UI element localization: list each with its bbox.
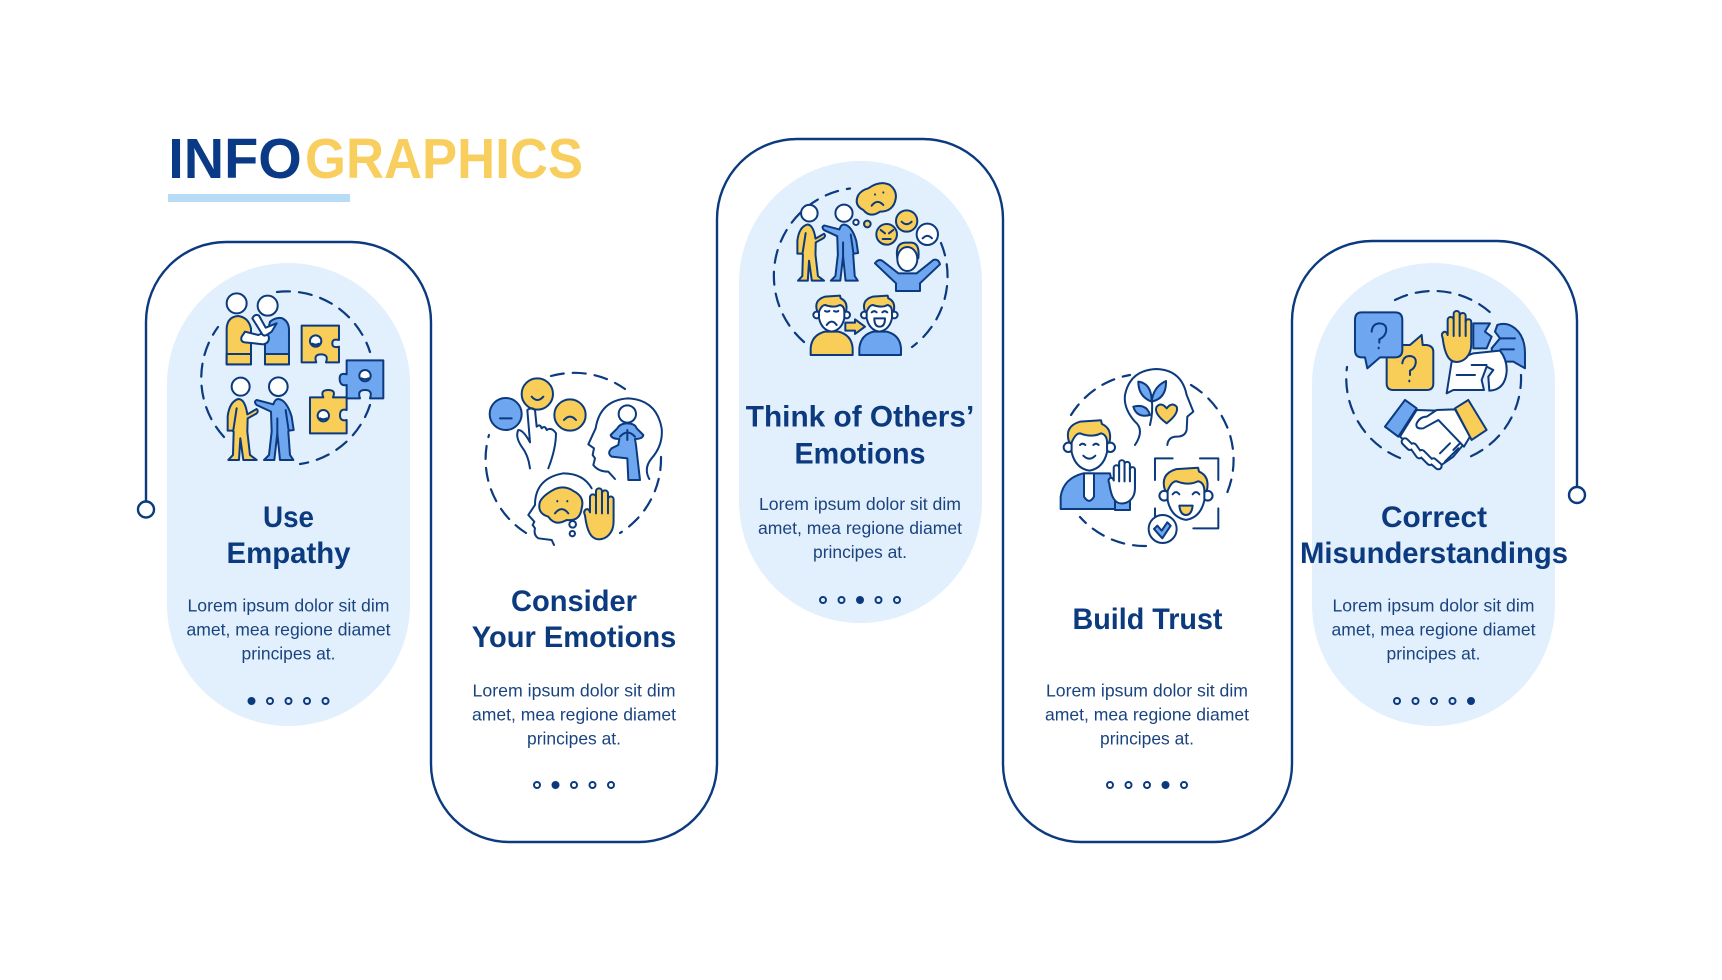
body text: Lorem ipsum dolor sit dim — [188, 596, 390, 616]
icon: misunderstandings — [1346, 291, 1525, 468]
icon: empathy — [201, 291, 383, 464]
body text: amet, mea regione diamet — [472, 704, 676, 724]
progress dots — [1394, 698, 1474, 704]
icon: emotions — [486, 373, 662, 545]
heading: Use — [263, 501, 314, 534]
body text — [1332, 596, 1536, 664]
body text: principes at. — [1100, 728, 1194, 748]
panel backgrounds: light blue pills — [167, 161, 1555, 726]
heading: Consider — [511, 585, 637, 618]
panel: build trust — [1045, 369, 1249, 788]
heading: Your Emotions — [472, 621, 676, 654]
panel: correct misunderstandings — [1300, 291, 1568, 704]
title: INFO — [168, 127, 302, 191]
body text — [186, 596, 391, 664]
heading — [226, 501, 351, 570]
progress dots — [248, 698, 328, 704]
heading: Emotions — [794, 438, 926, 470]
progress dots — [1107, 782, 1187, 788]
body text: Lorem ipsum dolor sit dim — [1332, 596, 1534, 616]
icon: others' emotions — [774, 183, 948, 355]
title: GRAPHICS — [305, 127, 583, 191]
heading: Misunderstandings — [1300, 537, 1568, 570]
body text — [758, 494, 962, 562]
body text: Lorem ipsum dolor sit dim — [472, 680, 676, 700]
progress dots — [820, 597, 900, 603]
body text: principes at. — [242, 644, 336, 664]
body text: amet, mea regione diamet — [1045, 704, 1249, 724]
heading: Build Trust — [1072, 603, 1223, 636]
heading: Think of Others’ — [746, 400, 974, 434]
title underline — [168, 194, 350, 202]
body text — [472, 680, 676, 748]
progress dots — [534, 782, 614, 788]
body text: Lorem ipsum dolor sit dim — [759, 494, 961, 514]
body text — [1045, 680, 1249, 748]
body text: amet, mea regione diamet — [758, 518, 962, 538]
heading — [1300, 501, 1568, 570]
connecting outline frame with end nodes — [138, 139, 1585, 842]
heading: Empathy — [226, 537, 351, 570]
heading — [472, 585, 676, 654]
panel: consider your emotions — [472, 373, 676, 788]
body text: amet, mea regione diamet — [186, 620, 391, 640]
heading — [746, 400, 974, 470]
body text: principes at. — [813, 542, 907, 562]
heading: Correct — [1381, 501, 1487, 534]
body text: amet, mea regione diamet — [1332, 620, 1536, 640]
body text: principes at. — [527, 728, 621, 748]
title — [168, 127, 583, 191]
body text: principes at. — [1386, 644, 1480, 664]
icon: trust — [1061, 369, 1234, 546]
panel: think of others' emotions — [746, 183, 974, 603]
panel: use empathy — [186, 291, 391, 704]
body text: Lorem ipsum dolor sit dim — [1046, 680, 1248, 700]
